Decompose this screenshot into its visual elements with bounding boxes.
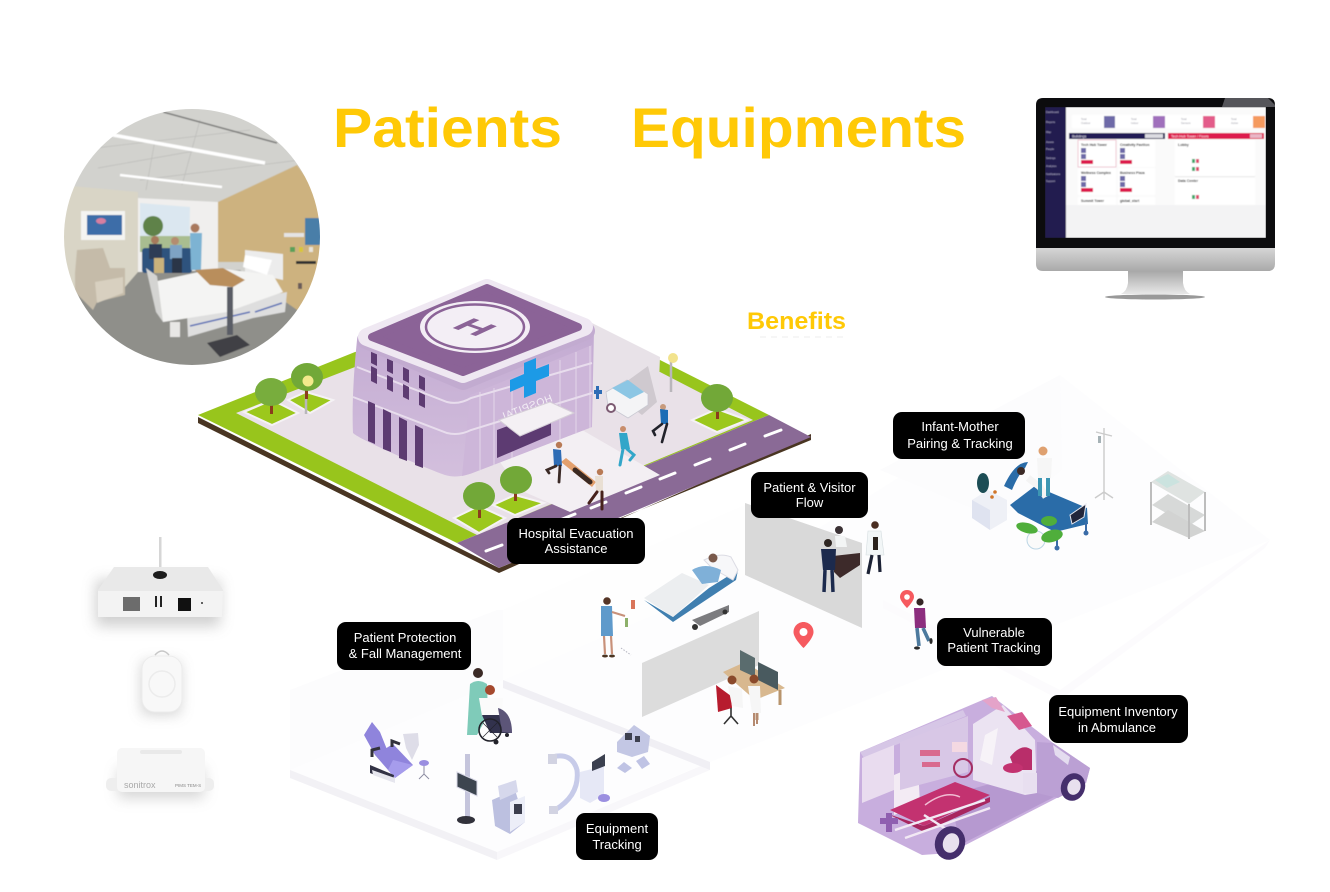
small ambulance	[594, 380, 648, 418]
dashboard screen: Assets	[1046, 140, 1054, 144]
blanket	[153, 268, 283, 322]
ambulance body	[858, 696, 1090, 855]
nurse holding baby	[1038, 446, 1048, 456]
label: Infant-Mother Pairing & Tracking: Infant-Mother	[921, 419, 999, 434]
pin large hole	[800, 628, 808, 636]
title: Equipments: Equipments	[631, 96, 966, 159]
building cards: Tech Hub Tower	[1081, 143, 1108, 147]
dashboard screen: Analytics	[1046, 164, 1057, 168]
label: Patient Protection & Fall Management	[337, 622, 471, 670]
label: Hospital Evacuation Assistance	[507, 518, 645, 564]
over-bed table	[195, 268, 245, 287]
building walls	[353, 330, 594, 476]
dashboard stat cards	[1072, 115, 1262, 128]
lawn	[198, 330, 769, 543]
building cards: Wellness Complex	[1081, 171, 1111, 175]
plant	[1027, 531, 1045, 549]
label: Patient Protection & Fall Management: & Fall Management	[349, 646, 462, 661]
label: Patient & Visitor Flow: Flow	[796, 495, 824, 510]
guard	[653, 404, 668, 442]
dashboard screen: Indoor	[1131, 121, 1138, 125]
dashboard screen: Active	[1231, 121, 1239, 125]
label: Patient Protection & Fall Management: Patient Protection	[354, 630, 456, 645]
dashboard screen	[1045, 107, 1266, 238]
tree patches	[244, 392, 747, 533]
label: Vulnerable Patient Tracking: Vulnerable	[963, 625, 1025, 640]
building cards: Summit Tower	[1081, 199, 1105, 203]
medical shelf	[920, 750, 940, 756]
dashboard screen: Sensors	[1181, 121, 1191, 125]
helipad: H	[443, 315, 505, 340]
label: Vulnerable Patient Tracking: Patient Tracking	[947, 640, 1041, 655]
rear window	[862, 745, 894, 803]
nurse and wheelchair	[467, 668, 512, 744]
dashboard screen: Total	[1181, 117, 1187, 121]
partition wall: lower	[642, 611, 759, 717]
ceiling lights	[113, 135, 265, 163]
dashboard screen: Total	[1081, 117, 1087, 121]
nurse	[190, 224, 200, 232]
label: Equipment Tracking: Equipment	[586, 821, 648, 836]
ceiling tiles	[96, 120, 300, 190]
dashboard screen: Total	[1231, 117, 1237, 121]
label: Patient & Visitor Flow	[751, 472, 868, 518]
base slab shadow	[198, 417, 811, 573]
entrance door	[497, 410, 551, 458]
trees	[255, 363, 733, 518]
dashboard screen: Total	[1131, 117, 1137, 121]
street lamps	[306, 353, 678, 414]
bed	[1010, 486, 1088, 532]
hospital illustration	[198, 288, 811, 573]
dashboard screen: Buildings	[1072, 134, 1086, 138]
building cards: Business Plaza	[1120, 171, 1145, 175]
building cards: Creativity Pavilion	[1120, 143, 1149, 147]
framed art	[81, 211, 125, 240]
garage	[590, 322, 660, 405]
label: Infant-Mother Pairing & Tracking: Pairing & Tracking	[907, 436, 1013, 451]
walking person	[914, 598, 933, 650]
wall monitor and controls	[304, 218, 320, 246]
label: Equipment Tracking	[576, 813, 658, 860]
label: Vulnerable Patient Tracking	[937, 618, 1052, 666]
runner nurse	[619, 426, 634, 465]
workstation with staff	[716, 650, 785, 726]
device: wall sensor: PIMS TEM-S	[175, 783, 201, 788]
cab	[1037, 742, 1090, 798]
IV stand	[1095, 428, 1113, 500]
dashboard pink header	[1168, 133, 1264, 139]
dashboard screen: Settings	[1046, 156, 1056, 160]
helipad	[420, 301, 530, 353]
c-arm scanner	[548, 754, 610, 814]
pavement	[236, 340, 753, 535]
floor cards: Lobby	[1178, 143, 1189, 147]
supply trolley	[1151, 471, 1205, 539]
pin small hole	[904, 594, 910, 600]
heading: Benefits: Benefits	[747, 308, 846, 335]
dashboard screen: Tech Hub Tower / Floors	[1171, 134, 1209, 138]
interior opening	[973, 705, 1037, 795]
bed headboard	[245, 250, 283, 280]
monitor bezel	[1036, 98, 1275, 248]
label: Equipment Tracking: Tracking	[592, 837, 642, 852]
floor	[950, 770, 1058, 845]
cross mark	[880, 813, 898, 832]
pin large	[794, 622, 814, 648]
device: gateway with antenna	[96, 537, 223, 626]
building cards	[1078, 140, 1155, 205]
bed frame	[187, 292, 287, 337]
red seat	[1010, 747, 1032, 770]
dashboard screen: Reports	[1046, 120, 1056, 124]
monitor with dashboard	[1036, 98, 1275, 300]
roof strip	[860, 710, 966, 758]
monitor stand	[1121, 271, 1190, 294]
road	[457, 415, 811, 568]
label: Hospital Evacuation Assistance: Hospital Evacuation	[519, 526, 633, 541]
monitor on pole	[457, 754, 477, 824]
ultrasound cart	[492, 780, 525, 834]
patient standing	[601, 597, 635, 658]
roof	[366, 288, 586, 381]
stretcher team	[547, 442, 603, 509]
dashboard screen: Notifications	[1046, 172, 1061, 176]
dashboard screen: Map	[1046, 130, 1052, 134]
dashboard screen: People	[1046, 147, 1055, 151]
dashboard screen: Support	[1046, 179, 1055, 183]
dashboard screen: Outdoor	[1081, 121, 1091, 125]
device: wall sensor: sonitrox	[124, 780, 156, 790]
bed patient	[644, 554, 738, 630]
pin small	[900, 590, 914, 608]
label: Equipment Inventory in Abmulance: Equipment Inventory	[1058, 704, 1178, 719]
nightstand	[972, 490, 1007, 530]
device: wearable tag	[142, 651, 182, 714]
reception: visitor and staff	[821, 521, 884, 592]
dashboard sidebar	[1045, 107, 1066, 238]
facade bands	[353, 346, 592, 470]
label: Equipment Inventory in Abmulance: in Abmulance	[1078, 720, 1156, 735]
armchair	[75, 248, 125, 310]
wheels	[930, 770, 1089, 864]
device: wall sensor	[106, 748, 214, 798]
floor cards: Data Center	[1178, 179, 1199, 183]
dashboard screen: Dashboard	[1046, 110, 1059, 114]
canopy	[499, 402, 574, 436]
blue cross sign	[510, 358, 549, 398]
mirrored hospital sign: HOSPITAL	[498, 393, 554, 424]
title: Patients: Patients	[333, 96, 562, 159]
equipment: dental chair	[364, 722, 429, 783]
pillow	[243, 255, 272, 275]
maternity bed scene	[972, 446, 1088, 550]
partition wall: upper	[745, 503, 862, 628]
sofa and visitors	[142, 248, 192, 273]
windows	[368, 350, 425, 468]
monitor chin	[1036, 248, 1275, 271]
photo: hospital room	[60, 105, 330, 370]
interior wall	[900, 716, 968, 790]
label: Hospital Evacuation Assistance: Assistance	[545, 541, 607, 556]
label: Infant-Mother Pairing & Tracking	[893, 412, 1025, 459]
label: Patient & Visitor Flow: Patient & Visitor	[763, 480, 856, 495]
building cards: global_start	[1120, 199, 1140, 203]
road dashes	[486, 430, 781, 551]
stretcher	[890, 782, 990, 826]
floor cards	[1176, 143, 1254, 200]
patient monitor console	[617, 725, 650, 773]
dashboard navy header	[1069, 133, 1165, 139]
roof lights	[982, 697, 1005, 712]
panel: isometric floor plan	[290, 375, 1270, 860]
ambulance cutaway	[858, 696, 1090, 864]
label: Equipment Inventory in Abmulance	[1049, 695, 1188, 743]
